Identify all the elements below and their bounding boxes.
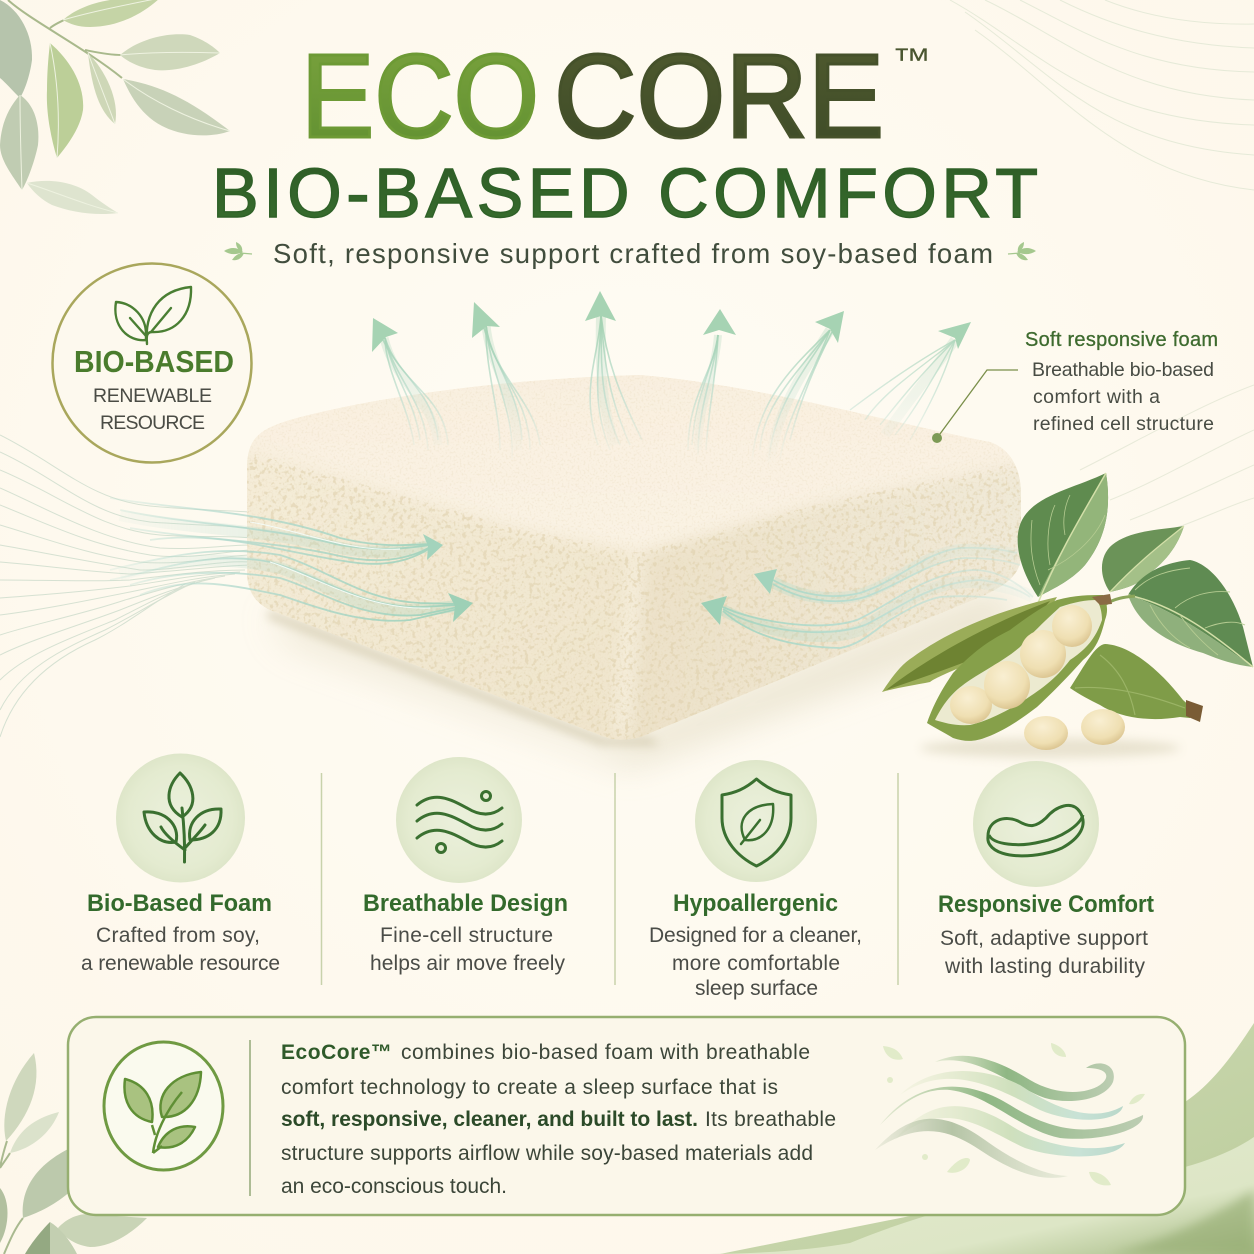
feature text	[81, 924, 280, 975]
icon: shield leaf	[695, 760, 817, 882]
feature text	[649, 924, 862, 1000]
background flow lines: left	[0, 435, 250, 737]
callout: soft responsive foam: Soft responsive foam	[1025, 329, 1218, 351]
title	[301, 30, 931, 163]
feature: breathable design	[363, 757, 568, 975]
panel body text: EcoCore™	[281, 1041, 392, 1064]
panel body text: soft, responsive, cleaner, and built to last.	[281, 1108, 698, 1131]
feature title: Bio-Based Foam	[87, 890, 272, 917]
airflow arrows: left side	[110, 498, 473, 622]
feature text	[940, 927, 1148, 978]
callout: soft responsive foam	[1025, 329, 1218, 435]
subtitle: Soft, responsive support crafted from soy-based foam	[273, 238, 993, 269]
foam shadow	[270, 590, 1020, 765]
icon: sprout in circle	[104, 1042, 223, 1170]
foam top face	[260, 434, 1004, 548]
title: ECO	[301, 30, 539, 163]
feature text: Soft, adaptive support	[940, 927, 1148, 950]
soy pod right	[1070, 644, 1203, 722]
feature text: Fine-cell structure	[380, 924, 553, 947]
icon: subtitle ornament left	[224, 242, 252, 260]
foam right face	[630, 516, 824, 738]
feature text	[370, 924, 566, 975]
airflow arrow 3	[585, 291, 642, 450]
feature text: Crafted from soy,	[96, 924, 260, 947]
airflow arrow 2	[472, 302, 540, 460]
soybean plant	[882, 473, 1253, 758]
background flow lines: right	[1080, 385, 1254, 530]
panel body text: combines bio-based foam with breathable	[401, 1041, 810, 1064]
decoration: bottom-right green hills	[700, 1023, 1254, 1254]
foam texture	[240, 370, 1030, 750]
decoration: bottom-left leaves	[0, 1053, 147, 1254]
foam block	[247, 375, 1021, 740]
callout: soft responsive foam: comfort with a	[1033, 386, 1160, 408]
title: ™	[892, 41, 931, 78]
airflow arrows: right side	[701, 548, 1033, 648]
feature text: helps air move freely	[370, 952, 566, 975]
feature text: sleep surface	[695, 977, 818, 1000]
airflow arrow 1	[372, 318, 448, 450]
callout: soft responsive foam: Breathable bio-based	[1032, 359, 1214, 381]
airflow arrow 5	[752, 311, 844, 470]
feature: responsive comfort	[938, 761, 1154, 978]
badge: bio-based renewable resource	[52, 264, 252, 462]
airflow arrow 4	[688, 309, 736, 455]
heading: BIO-BASED COMFORT	[212, 154, 1038, 232]
soy pod open	[927, 594, 1112, 741]
icon: memory pillow	[973, 761, 1099, 887]
decoration: top-left leaves	[0, 0, 230, 214]
illustration: wind swirl	[875, 1043, 1145, 1185]
feature text: Designed for a cleaner,	[649, 924, 862, 947]
feature text: with lasting durability	[944, 955, 1146, 978]
soy leaf top	[1018, 473, 1108, 603]
feature text: more comfortable	[672, 952, 840, 975]
foam left face	[442, 554, 622, 740]
badge text: RESOURCE	[100, 412, 205, 434]
soybeans	[950, 605, 1125, 750]
panel body text: comfort technology to create a sleep surface that is	[281, 1076, 778, 1099]
airflow arrow 6	[850, 322, 971, 440]
icon: plant	[116, 754, 245, 882]
foam pores	[240, 440, 1030, 750]
feature title: Responsive Comfort	[938, 891, 1154, 918]
soy pod left	[882, 597, 1057, 692]
leader line and dot	[932, 370, 1018, 443]
title: CORE	[554, 30, 884, 163]
callout: soft responsive foam: refined cell structure	[1033, 413, 1214, 435]
feature title: Breathable Design	[363, 890, 568, 917]
icon: subtitle ornament right	[1008, 242, 1036, 260]
feature text: a renewable resource	[81, 952, 280, 975]
panel body text: structure supports airflow while soy-based materials add	[281, 1142, 813, 1165]
feature title: Hypoallergenic	[673, 890, 838, 917]
soy leaf middle	[1102, 526, 1184, 592]
icon: badge leaves	[115, 287, 191, 344]
soy leaf right	[1128, 560, 1253, 667]
badge text	[93, 385, 212, 434]
feature: hypoallergenic	[649, 760, 862, 1000]
panel body text: Its breathable	[705, 1108, 836, 1131]
panel body text: an eco-conscious touch.	[281, 1175, 507, 1198]
panel body text	[281, 1041, 836, 1198]
icon: air waves	[396, 757, 522, 883]
feature: bio-based foam	[81, 754, 280, 975]
badge text: RENEWABLE	[93, 385, 212, 407]
badge title: BIO-BASED	[74, 344, 234, 379]
background flow lines: top right	[950, 0, 1254, 190]
panel: summary	[68, 1017, 1185, 1215]
